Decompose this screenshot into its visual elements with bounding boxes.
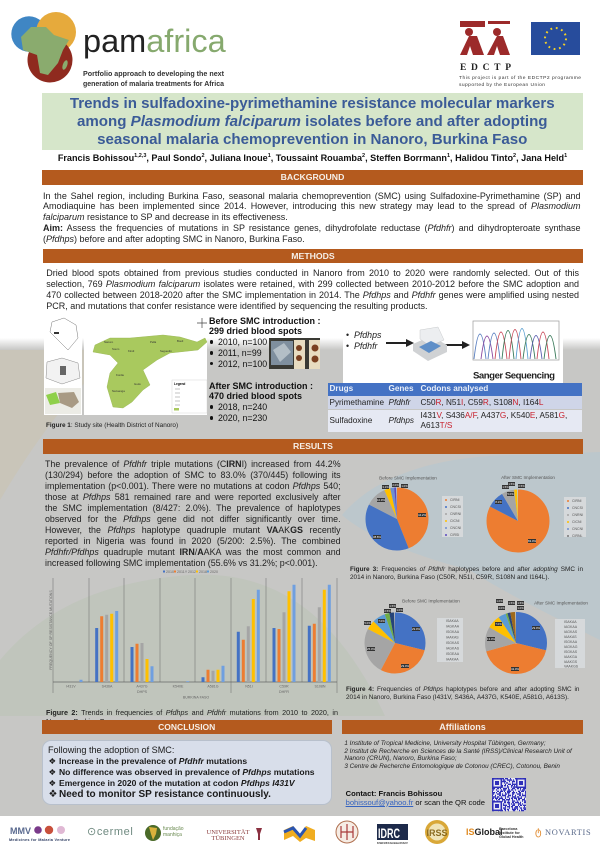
authors: Francis Bohissou1,2,3, Paul Sondo2, Juliana Inoue1, Toussaint Rouamba2, Steffen Borrmann1, Halidou Tinto2, Jana Held1 [58,153,567,163]
logo: Universitat Tubingen: TÜBINGEN [211,835,245,842]
caption: figure 3: Figure 3: Frequencies of Pfdhfr haplotypes before and after adopting SMC in [350,566,583,572]
logo: EDCTP: supported by the European Union [459,82,545,88]
table row: pyrimethamine: Pyrimethamine [330,398,384,407]
text: background: (Pfdhps) before and after adopting SMC in Nanoro, Burkina Faso. [43,234,305,244]
chart: figure 3 Pfdhfr pie after: CICNI [572,520,582,524]
chart: figure 4 Pfdhps pie after: IAAKGA [564,655,578,659]
text: background: Aim: Assess the frequencies of mutations in SP resistance genes, dihydrofolate reductase (Pfdhfr) and dihydropteroate synthase [43,223,580,233]
table row: pyrimethamine [328,396,582,409]
chart: figure 4 Pfdhps pie before: 29.0% [412,627,420,631]
chart: figure 2 mutation frequency bars: 2010 [166,570,174,574]
chart: figure 3 Pfdhfr pie before: 44.2% [418,513,426,517]
logo: ISGlobal [466,827,524,839]
logo: MMV: MMV [10,826,31,836]
logo: fundacao manhica: manhiça [163,832,182,838]
chart: figure 3 Pfdhfr pie after: 1.5% [502,485,509,489]
text: results [45,458,341,568]
chart: figure 3 Pfdhfr pie before: 38.8% [373,535,381,539]
logo: EDCTP: This project is part of the EDCTP2 programme [459,75,581,81]
sampling: after SMC: 2018, n=240 [218,402,267,412]
table row: sulfadoxine: Pfdhps [388,416,414,425]
text: results: However, the Pfdhps haplotype quadruple mutant VAAKGS recently [45,524,341,534]
logo: IRSS: IRSS [426,828,448,838]
workflow diagram [386,320,560,382]
chart: figure 3 Pfdhfr pie after: CIRNI [572,499,582,503]
chart: figure 3 Pfdhfr pie before: CIRNI [450,498,460,502]
text: results: reported in Nigeria was found in 2020 (5/200: 2.5%). The combined [45,536,341,546]
chart: figure 3 Pfdhfr pie before: Before SMC Implementation [379,476,437,480]
sampling: after SMC: After SMC introduction : [209,380,313,390]
heading: affiliations [342,720,583,734]
text: results: those at Pfdhps 581 remained rare and were reported exclusively after [45,492,341,502]
text: methods: Dried blood spots obtained from previous studies conducted in Nanoro from 2010 to 2020 were randomly selected. Out of this [46,268,579,278]
chart: figure 2 mutation frequency bars: I431V [66,684,76,688]
chart: figure 4 Pfdhps pie after: IAGKAA [564,625,578,629]
sampling: before SMC: Before SMC introduction : [209,316,320,326]
heading: methods [43,249,583,263]
text: affiliations: Nanoro (CRUN), Nanoro, Burkina Faso; [344,755,457,762]
logo: fundacao manhica: fundação [163,826,184,832]
chart: figure 4 Pfdhps pie before: ISGKAA [446,630,460,634]
chart: figure 2 mutation frequency bars: K540E [173,684,184,688]
caption: figure 4: 2014 in Nanoro, Burkina Faso (I431V, S436A, A437G, K540E, A581G, A613S). [346,694,569,701]
chart: figure 4 Pfdhps pie after: 42.0% [511,667,519,671]
text: background: In the Sahel region, including Burkina Faso, seasonal malaria chemoprevention (SMC) using Sulfadoxine-Pyrimethamine (SP) and [43,190,580,200]
chart: figure 2 mutation frequency bars: C59R [279,684,289,688]
logo: fundacao manhica [145,825,184,841]
title: Trends in sulfadoxine-pyrimethamine resistance molecular markers [70,95,555,112]
table row: sulfadoxine: A613T/S [420,421,452,430]
logo: IRSS [425,820,449,844]
conclusion point: Pfdhps: No difference was observed in prevalence of Pfdhps mutations [59,766,315,776]
chart: figure 4 Pfdhps pie after: VAAKGS [564,664,579,668]
figure 1: study site map: Godo [134,382,141,386]
logo: M mark [283,826,315,842]
contact: Contact: Francis Bohissou [346,788,442,798]
figure 1: study site map: Nanoro [104,340,114,344]
figure 1: study site map: Legend [174,382,185,386]
text: methods: selection, 769 Plasmodium falciparum isolates were retained, with 299 collected between 2010-2012 before the SMC adoption and [46,278,579,288]
heading: background: BACKGROUND [281,172,344,182]
logo: Universitat Tubingen: UNIVERSITÄT [207,829,250,836]
text: affiliations [344,740,572,770]
chart: figure 3 Pfdhfr pie after: 1.5% [508,482,515,486]
conclusion point: Pfdhfr: Increase in the prevalence of Pfdhfr mutations [59,756,247,766]
chart: figure 4 Pfdhps pie before: IAAKAS [446,636,459,640]
chart: figure 2 mutation frequency bars: BURKINA FASO [183,696,209,700]
sampling: before SMC: 2012, n=100 [218,359,267,369]
conclusion point: I431V: Emergence in 2020 of the mutation at codon Pfdhps I431V [59,778,295,788]
sampling: after SMC: 2020, n=230 [218,413,267,423]
workflow diagram: Sanger Sequencing [473,370,555,382]
chart: figure 2 mutation frequency bars: 2020 [210,570,218,574]
heading: results: RESULTS [293,441,333,451]
chart: figure 4 Pfdhps pie after: 13.0% [487,637,495,641]
caption: figure 2: Figure 2: Trends in frequencies of Pfdhps and Pfdhfr mutations from 2010 to 2020, in Nanoro, Burkina Faso [46,708,338,726]
chart: figure 3 Pfdhfr pie after: 8.1% [495,500,502,504]
figure 1: study site map: Soum [112,347,120,351]
chart: figure 4 Pfdhps pie after: IAAKAS [564,635,577,639]
caption: figure 3 [350,566,583,580]
chart: figure 2 mutation frequency bars: DHFR [279,690,289,694]
table row: sulfadoxine: Sulfadoxine [330,416,372,425]
panel: sequencing workflow [343,316,563,384]
chart: figure 4 Pfdhps pie before: 5.0% [364,621,371,625]
chart: figure 3 Pfdhfr pie after: CNCSI [572,506,583,510]
table header: Codons analysed [420,384,488,393]
table row: pyrimethamine: Pfdhfr [388,398,410,407]
chart: figure 4 Pfdhps pie before: ISAKAA [446,619,459,623]
conclusion intro: Following the adoption of SMC: [48,744,174,754]
chart: figure 2 mutation frequency bars: 2018 [199,570,207,574]
gene list: • Pfdhps [346,330,381,340]
text: Global Health [499,835,523,839]
table row: sulfadoxine: I431V, S436A/F, A437G, K540E, A581G, [420,411,567,420]
chart: figure 4 Pfdhps pie after: IAAKGS [564,660,578,664]
text: Barcelona [499,827,517,831]
chart: figure 3 Pfdhfr pie after: After SMC Implementation [501,475,555,480]
chart: figure 3 Pfdhfr pie before: 1.0% [401,484,408,488]
table header: Genes [388,384,414,393]
logo: IDRC [377,824,408,845]
logo: MMV [9,826,70,842]
chart: figure 3 Pfdhfr pie before: CNRNI [450,512,461,516]
chart: figure 3 Pfdhfr pie after: 5.0% [507,492,514,496]
chart: figure 4 Pfdhps pie before: 29.0% [401,664,409,668]
chart: figure 3 Pfdhfr pie before: CIRSI [450,533,459,537]
figure 1: study site map: Kordie [116,373,125,377]
chart: figure 4 Pfdhps pie after: ISAKAA [564,620,577,624]
table row: sulfadoxine [328,410,582,432]
logo: CRSN [336,820,358,844]
panel: conclusion [42,740,332,804]
logo: IDRC: IDRC [378,825,400,841]
logo: EDCTP: EDCTP [460,63,511,73]
conclusion point: Pfdhfr: ❖ [48,756,56,766]
conclusion point: I431V: ❖ [48,778,56,788]
chart: figure 2 mutation frequency bars: 2012 [188,570,196,574]
chart: figure 4 Pfdhps pie before: ISGKAS [446,641,460,645]
text: background: falciparum resistance to SP and decrease in its effectiveness. [43,212,288,222]
logo: pamafrica [11,12,227,88]
text: Institute for [499,831,520,835]
logo: IDRC: INTERNATIONAL DEVELOPMENT [377,841,408,845]
chart: figure 3 Pfdhfr pie after: 0.5% [518,484,525,488]
text: affiliations: 1 Institute of Tropical Medicine, University Hospital Tübingen, Germany; [344,740,546,747]
white footer [0,816,600,849]
logo: Universitat Tubingen [206,828,262,842]
chart: figure 3 Pfdhfr pie after: CNCNI [572,527,583,531]
chart: figure 2 mutation frequency bars: S436A [102,684,113,688]
table row: pyrimethamine: C50R, N51I, C59R, S108N, I164L [420,398,543,407]
text: results: the SMC implementation (8/427: 2.0%). The prevalence of haplotypes [45,502,341,512]
chart: figure 3 Pfdhfr pie before: CNCSI [450,505,461,509]
logo: EU flag [531,22,580,55]
chart: figure 4 Pfdhps pie after: 29.0% [532,626,540,630]
sampling: before SMC: 2011, n=99 [218,348,262,358]
conclusion point: Pfdhps: ❖ [48,766,56,776]
figure 1: study site map: Seguedin [160,349,172,353]
chart: figure 3 Pfdhfr pie before: 2.0% [392,483,399,487]
caption: figure 3: 2014 in Nanoro, Burkina Faso (C50R, N51I, C59R, S108N and I164L). [350,574,549,580]
table header [328,383,582,396]
chart: figure 4 Pfdhps pie after: 4.0% [498,606,505,610]
caption: figure 1: Figure 1: Study site (Health District of Nanoro) [46,422,178,429]
contact: bohissouf@yahoo.fr or scan the QR code [346,798,485,807]
chart: figure 3 Pfdhfr pie before: CNCNI [450,526,461,530]
chart: figure 4 Pfdhps pie after: 1.5% [508,601,515,605]
chart: figure 2 mutation frequency bars: DHPS [137,690,148,694]
figure 1: study site map: Pella [150,340,157,344]
caption: figure 4: Figure 4: Frequencies of Pfdhps haplotypes before and after adopting SMC in [346,686,579,693]
figure 1: study site map: Bouli [177,339,184,343]
heading: background [42,170,583,185]
table: drugs, genes and codons [328,383,582,432]
chart: figure 2 mutation frequency bars: A581G [207,684,219,688]
chart: figure 4 Pfdhps pie after: IAGKAS [564,630,578,634]
logo: EDCTP [459,21,581,88]
chart: figure 4 Pfdhps pie after: IAGKAG [564,645,578,649]
chart: figure 4 Pfdhps pie before: 7.0% [378,619,385,623]
text: affiliations: 2 Institut de Recherche en Sciences de la Santé (IRSS)/Clinical Research Unit of [344,748,572,755]
text: results: (130/294) before the adoption of SMC to 83.0% (370/445) following its [45,470,341,480]
text: affiliations: 3 Centre de Recherche Entomologique de Cotonou (CREC), Cotonou, Benin [344,763,560,770]
heading: conclusion [42,720,332,734]
title: among Plasmodium falciparum isolates before and after adopting [77,113,548,130]
text: methods: 470 collected between 2018-2020 after the SMC implementation in 2014. The Pfdhps and Pfdhfr genes were amplified using nested [46,290,579,300]
chart: figure 4 Pfdhps pie before: 25.0% [367,647,375,651]
heading: conclusion: CONCLUSION [158,722,215,732]
chart: figure 2 mutation frequency bars: A437G [136,684,148,688]
chart: figure 4 Pfdhps pie before: IAGKAA [446,624,460,628]
logo: ISGlobal: ISGlobal [466,827,503,837]
text: results: Pfdhfr/Pfdhps quadruple mutant IRN/AAKA was the most common and [45,546,341,556]
chart: figure 4 Pfdhps pie after: 1.0% [496,599,503,603]
chart: figure 4 Pfdhps pie before: 1.0% [396,608,403,612]
sampling: after SMC [209,380,313,423]
text: results: implementation (p<0.001). There were no mutations at codon Pfdhps 540; [45,480,341,490]
caption: figure 4 [346,686,579,701]
gene list: • Pfdhfr [346,340,377,350]
chart: figure 4 Pfdhps pie before: Before SMC Implementation [402,598,460,604]
heading: results [43,439,583,454]
title [42,93,583,150]
table header: Drugs [330,384,353,393]
text: results: The prevalence of Pfdhfr triple mutations (CIRNI) increased from 44.2% [45,458,341,468]
figure 1: study site map: Kindi [128,349,135,353]
conclusion point: monitor: Need to monitor SP resistance continuously. [59,788,271,800]
chart: figure 3 Pfdhfr pie after: CIRNL [572,534,583,538]
chart: figure 4 Pfdhps pie after: ISGKAA [564,640,578,644]
chart: figure 4 Pfdhps pie after: 7.0% [495,622,502,626]
text: background [43,190,580,244]
heading: methods: METHODS [291,251,335,261]
figure 1: study site map: Nazoanga [112,389,125,393]
text: results: increased following SMC implementation (55.6% vs 31.2%; p<0.001). [45,558,318,568]
chart: figure 2 mutation frequency bars: S108N [314,684,326,688]
gene list [346,330,382,350]
chart: figure 2 mutation frequency bars: 2011 [177,570,185,574]
text: methods: PCR, and mutations that confer resistance were identified by sequencing the resulting products. [46,300,428,310]
chart: figure 2 mutation frequency bars: N51I [245,684,253,688]
chart: figure 4 Pfdhps pie before: IAGKAS [446,646,460,650]
logo: pamafrica: pamafrica [83,23,227,59]
logo: MMV: Medicines for Malaria Venture [9,838,70,842]
logo: Novartis: ტ NOVARTIS [535,827,591,838]
sampling: before SMC: 299 dried blood spots [209,326,302,336]
heading: affiliations: Affiliations [439,722,486,732]
chart: figure 3 Pfdhfr pie before: 10.9% [377,498,385,502]
title: seasonal malaria chemoprevention in Nanoro, Burkina Faso [97,131,527,148]
logo: pamafrica: Portfolio approach to developing the next [83,69,225,78]
conclusion point: monitor: ❖ [48,788,57,800]
text: background: Amodiaquine has been implemented since 2014. However, introducing this new strategy may lead to the spread of Plasmodium [43,201,580,211]
chart: figure 4 Pfdhps pie after: ISGKAS [564,650,578,654]
sampling: before SMC [209,316,320,369]
chart: figure 3 Pfdhfr pie before: CICNI [450,519,460,523]
contact [346,788,485,807]
logo: pamafrica: generation of malaria treatments for Africa [83,79,225,88]
chart: figure 3 Pfdhfr pie before: 3.1% [382,485,389,489]
text: results: observed for the Pfdhps gene did not differ significantly over time. [45,514,341,524]
chart: figure 4 Pfdhps pie before: 2.5% [384,609,391,613]
chart: figure 2 mutation frequency bars: FREQUENCY OF SP RESISTANCE MUTATIONS [49,590,53,670]
sampling: before SMC: 2010, n=100 [218,337,267,347]
chart: figure 4 Pfdhps pie before: ISGEAA [446,652,460,656]
chart: figure 4 Pfdhps pie before: 1.5% [389,604,396,608]
chart: figure 4 Pfdhps pie after: After SMC Implementation [534,600,588,606]
chart: figure 4 Pfdhps pie after: 1.5% [517,601,524,605]
logo: cermel: ⊙cermel [87,826,133,838]
chart: figure 3 Pfdhfr pie after: CNRNI [572,513,583,517]
text: methods [46,268,579,311]
chart: figure 4 Pfdhps pie after: 1.0% [517,606,524,610]
chart: figure 4 Pfdhps pie before: IAAKAA [446,658,459,662]
chart: figure 3 Pfdhfr pie after: 83.0% [528,539,536,543]
sampling: after SMC: 470 dried blood spots [209,391,302,401]
